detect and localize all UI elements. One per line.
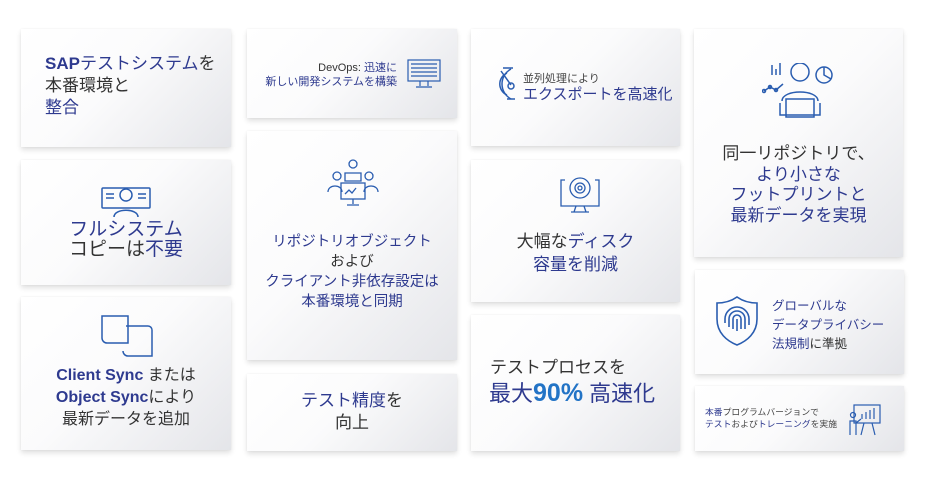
text: footprint: [722, 144, 875, 224]
text: test accuracy: 向上: [335, 413, 369, 432]
text: privacy: 法規制に準拠: [772, 337, 847, 351]
text: SAP heading: 整合: [45, 98, 79, 117]
text: client sync: Object Syncにより: [56, 389, 196, 406]
card: privacy: [695, 270, 904, 374]
card: SAP test system: [21, 29, 231, 147]
card: repository objects: [247, 131, 457, 360]
icon: speedometer: [499, 67, 515, 100]
text: 90%: 最大90% 高速化: [489, 379, 655, 407]
text: training: 本番プログラムバージョンで: [705, 407, 819, 417]
text: training: [705, 407, 837, 428]
text: disk: 容量を削減: [533, 255, 618, 274]
text: SAP heading: 本番環境と: [45, 76, 130, 95]
text: client sync: [56, 367, 196, 428]
text: test accuracy: [301, 391, 403, 432]
card: disk reduction: [471, 160, 680, 302]
text: repository: リポジトリオブジェクト: [272, 234, 432, 250]
text: test accuracy: テスト精度を: [301, 391, 403, 410]
text: SAP heading: [45, 54, 215, 117]
text: privacy: グローバルな: [772, 299, 847, 313]
card: smaller footprint: [694, 29, 903, 257]
text: repository: [265, 233, 439, 310]
icon: person with screens: [101, 187, 151, 217]
icon: sync squares: [101, 315, 153, 357]
text: repository: 本番環境と同期: [301, 294, 403, 310]
text: footprint: 同一リポジトリで、: [722, 144, 875, 163]
text: DevOps: [265, 62, 397, 88]
icon: monitor gear: [560, 177, 600, 213]
card: 90% faster: [471, 315, 680, 451]
text: footprint: 最新データを実現: [730, 206, 866, 224]
text: disk: 大幅なディスク: [517, 232, 634, 251]
icon: presenter: [849, 404, 881, 436]
text: disk: [517, 232, 634, 274]
card: full system copy: [21, 160, 231, 285]
text: DevOps: DevOps: 迅速に: [318, 62, 397, 74]
text: parallel export: [523, 72, 673, 103]
text: repository: および: [330, 254, 374, 270]
text: training: テストおよびトレーニングを実施: [705, 418, 837, 428]
card: training: [695, 386, 904, 451]
text: full system copy: フルシステム: [69, 219, 183, 240]
icon: monitor: [407, 59, 441, 88]
text: privacy: [772, 299, 884, 351]
icon: shield fingerprint: [716, 296, 758, 346]
card: parallel export: [471, 29, 680, 146]
text: repository: クライアント非依存設定は: [265, 274, 439, 290]
text: parallel export: 並列処理により: [523, 73, 600, 85]
text: full system copy: [69, 219, 183, 260]
card: DevOps: [247, 29, 457, 118]
text: SAP heading: SAPテストシステムを: [45, 54, 215, 73]
card: client sync: [21, 297, 231, 450]
text: client sync: Client Sync または: [56, 367, 196, 384]
text: DevOps: 新しい開発システムを構築: [265, 76, 397, 88]
text: parallel export: エクスポートを高速化: [523, 86, 673, 103]
card: test accuracy: [247, 374, 457, 451]
text: full system copy: コピーは不要: [69, 239, 183, 260]
text: privacy: データプライバシー: [772, 318, 884, 332]
text: footprint: より小さな: [756, 164, 841, 184]
icon: team at screen: [327, 159, 379, 206]
text: test process: テストプロセスを: [490, 358, 626, 377]
icon: analyst: [762, 63, 833, 118]
text: footprint: フットプリントと: [730, 185, 866, 204]
text: client sync: 最新データを追加: [62, 411, 190, 428]
